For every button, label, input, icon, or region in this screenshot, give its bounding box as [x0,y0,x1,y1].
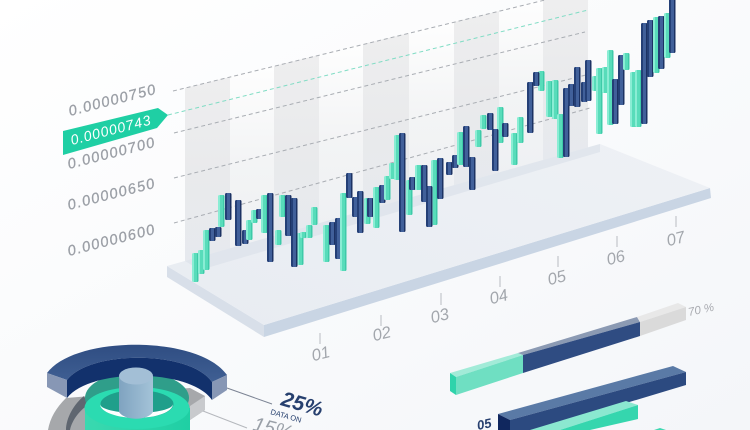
center cylinder [119,368,153,419]
navy arc [47,345,227,400]
donut chart [47,345,227,430]
time axis ticks and labels: 06 [605,247,628,269]
dark teal back ring [85,372,189,424]
leader lines [203,388,272,428]
price axis labels: 0.00000750 [67,82,157,120]
price axis labels [66,82,157,260]
back wall with alternating bands [185,0,588,268]
progress label 70%: 70 % [687,302,715,319]
price axis labels: 0.00000700 [66,135,156,173]
time axis ticks and labels: 04 [488,286,510,308]
dashed price gridlines [168,0,590,223]
price axis labels: 0.00000650 [66,176,156,214]
progress bar lower [530,401,638,430]
candlestick chart [192,0,676,282]
progress bar bottom edge [654,428,666,430]
donut label 25%: DATA ON [269,407,303,425]
platform [167,144,711,337]
time axis ticks and labels: 05 [546,267,569,289]
progress bar middle [498,366,686,430]
time axis ticks and labels: 02 [371,323,393,345]
time axis ticks and labels: 03 [429,305,452,327]
time axis ticks and labels: 01 [310,343,332,365]
time axis ticks and labels: 07 [665,228,688,250]
progress bar top [450,303,686,395]
current price tag [63,108,168,155]
teal ring [84,387,190,430]
gray ring segment [48,388,205,430]
price axis labels: 0.00000600 [66,222,156,260]
current price tag: 0.00000743 [69,112,152,148]
time axis ticks and labels [310,216,688,365]
donut label 25%: 25% [278,387,326,421]
